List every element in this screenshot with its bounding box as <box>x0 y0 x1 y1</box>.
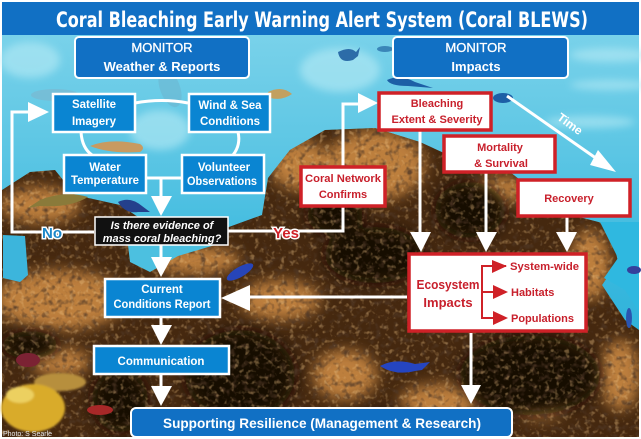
box: water temperature: Temperature <box>71 175 139 187</box>
box: mortality and survival: & Survival <box>474 158 528 170</box>
box: coral network confirms <box>301 167 385 206</box>
photo credit: Photo: S Searle <box>3 431 52 438</box>
arrow: communication to supporting resilience <box>151 374 172 406</box>
arrow: mortality to ecosystem impacts <box>476 173 497 252</box>
arrow: time: Time <box>555 110 586 138</box>
fish <box>28 46 641 373</box>
box: evidence question: mass coral bleaching? <box>103 233 222 245</box>
box: wind and sea conditions <box>189 94 270 132</box>
arrow: time <box>507 96 616 172</box>
panel: monitor weather and reports: Weather & Reports <box>104 59 220 74</box>
box: coral network confirms: Confirms <box>319 189 367 201</box>
water gaps in reef <box>3 235 28 282</box>
label: ecosystem impacts <box>416 277 480 310</box>
box: satellite imagery: Imagery <box>72 116 117 128</box>
box: volunteer observations: Observations <box>187 176 257 188</box>
box: communication <box>94 346 229 374</box>
label: habitats: Habitats <box>511 287 554 299</box>
panel: monitor impacts <box>393 37 568 78</box>
box: satellite imagery: Satellite <box>72 99 116 111</box>
box: supporting resilience: Supporting Resilience (Management & Research) <box>163 415 481 431</box>
panel: ecosystem impacts <box>409 254 586 331</box>
label: yes: Yes <box>273 225 299 242</box>
box: water temperature: Water <box>89 162 121 174</box>
panel: monitor impacts: MONITOR <box>445 40 507 55</box>
coral dark shadows <box>2 182 600 437</box>
yellow coral <box>1 373 86 432</box>
box: communication: Communication <box>118 356 204 368</box>
box: volunteer observations <box>182 155 264 193</box>
branching arrows <box>482 260 508 325</box>
box: supporting resilience <box>131 408 512 437</box>
box: wind and sea conditions: Wind & Sea <box>198 100 262 112</box>
arrow: yes to bleaching extent <box>228 93 378 231</box>
label: no: No <box>42 225 62 242</box>
arrow: no loop back to satellite imagery <box>12 102 94 232</box>
box: current conditions report: Current <box>141 284 183 296</box>
box: current conditions report <box>105 279 220 317</box>
box: recovery: Recovery <box>544 193 595 205</box>
panel: monitor weather and reports: MONITOR <box>131 40 193 55</box>
box: evidence question: Is there evidence of <box>111 220 215 232</box>
label: populations: Populations <box>511 313 574 325</box>
arrow: bleaching to ecosystem impacts <box>410 131 431 252</box>
label: ecosystem impacts: Impacts <box>423 295 473 310</box>
box: satellite imagery <box>53 94 135 132</box>
title banner <box>2 2 639 35</box>
panel: monitor impacts: Impacts <box>451 59 501 74</box>
arrow: ecosystem impacts to current conditions <box>221 285 407 311</box>
box: recovery <box>518 180 630 216</box>
arrow: recovery to ecosystem impacts <box>556 217 577 252</box>
box: bleaching extent and severity <box>379 93 491 130</box>
box: coral network confirms: Coral Network <box>305 173 382 185</box>
arrow: evidence to current conditions <box>151 245 172 277</box>
panel: monitor weather and reports <box>75 37 249 78</box>
connector: monitoring cycle <box>81 100 239 178</box>
box: volunteer observations: Volunteer <box>198 162 251 174</box>
box: water temperature <box>64 155 146 193</box>
label: system-wide: System-wide <box>510 261 579 273</box>
box: bleaching extent and severity: Bleaching <box>411 98 463 110</box>
arrow: reports to evidence question <box>151 178 172 216</box>
box: mortality and survival: Mortality <box>477 142 524 154</box>
box: wind and sea conditions: Conditions <box>200 116 260 128</box>
arrow: ecosystem impacts to supporting resilience <box>461 333 481 404</box>
box: mortality and survival <box>444 136 555 172</box>
arrow: current conditions to communication <box>151 317 172 345</box>
coral light patches <box>0 130 640 420</box>
box: evidence question <box>95 217 228 245</box>
label: ecosystem impacts: Ecosystem <box>416 277 480 292</box>
box: current conditions report: Conditions Report <box>114 299 211 311</box>
box: bleaching extent and severity: Extent & Severity <box>392 114 483 126</box>
